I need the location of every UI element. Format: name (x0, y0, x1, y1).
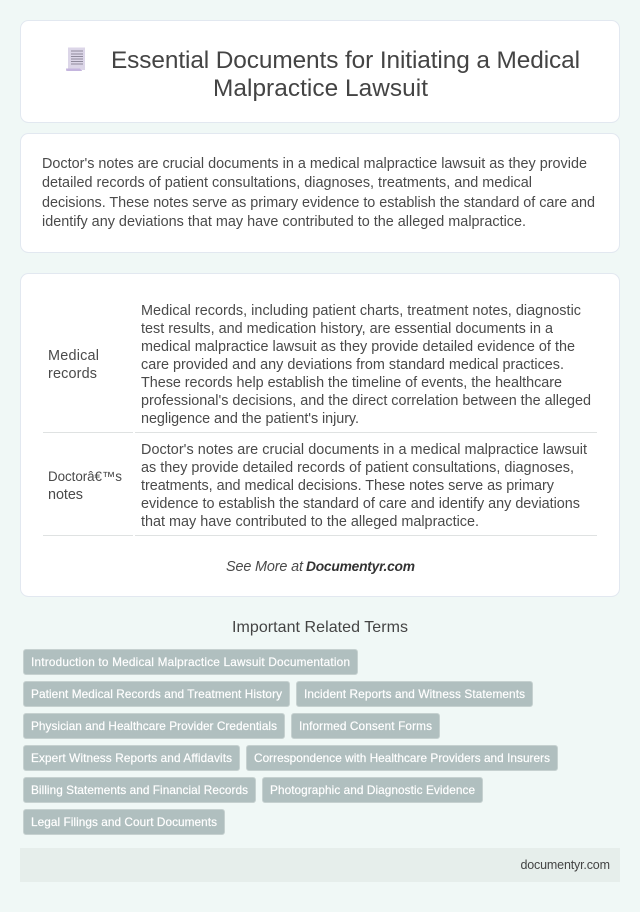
row label: medical records (48, 348, 99, 382)
row description: medical records (141, 303, 591, 427)
see more link: Documentyr.com (306, 559, 415, 574)
icon: document scroll (66, 48, 85, 71)
tag: Incident Reports and Witness Statements (304, 687, 525, 701)
row description: doctor's notes: that may have contributed to the alleged malpractice. (141, 514, 479, 530)
table row: medical records (48, 303, 591, 427)
tag (296, 682, 532, 706)
intro paragraph: Doctor's notes are crucial documents in a medical malpractice lawsuit as they provide (42, 156, 587, 172)
intro paragraph: detailed records of patient consultations, diagnoses, treatments, and medical (42, 175, 532, 191)
row description: doctor's notes: treatments, and medical decisions. These notes serve as primary (141, 478, 555, 494)
tag (24, 650, 358, 674)
tag (24, 746, 240, 770)
tag: Patient Medical Records and Treatment History (31, 687, 282, 701)
row label: doctor's notes: Doctorâ€™s (48, 469, 122, 484)
row description: medical records: professional's decisions, and the direct correlation between the alleged (141, 393, 591, 409)
row description: doctor's notes: Doctor's notes are crucial documents in a medical malpractice lawsuit (141, 442, 587, 458)
row description: medical records: care provided and any deviations from standard medical practices. (141, 357, 564, 373)
tag (24, 682, 290, 706)
intro paragraph: decisions. These notes serve as primary evidence to establish the standard of care and (42, 195, 595, 211)
title: Malpractice Lawsuit (213, 75, 428, 102)
row description: medical records: negligence and the patient's injury. (141, 411, 359, 427)
tag (24, 810, 224, 834)
tag (24, 778, 256, 802)
tag: Legal Filings and Court Documents (31, 815, 217, 829)
row label: doctor's notes (48, 469, 122, 503)
footer bar (20, 848, 620, 882)
panel: intro text card (20, 134, 620, 252)
row description: doctor's notes: as they provide detailed records of patient consultations, diagnoses, (141, 460, 574, 476)
row description: doctor's notes (141, 442, 587, 530)
table row: doctor's notes (48, 442, 587, 530)
row description: medical records: These records help establish the timeline of events, the healthcare (141, 375, 562, 391)
tag: Photographic and Diagnostic Evidence (270, 783, 475, 797)
tag (262, 778, 482, 802)
tag (292, 714, 440, 738)
row label: doctor's notes: notes (48, 487, 83, 503)
row label: medical records: records (48, 366, 97, 382)
tag: Introduction to Medical Malpractice Lawsuit Documentation (31, 655, 350, 669)
tag: Expert Witness Reports and Affidavits (31, 751, 232, 765)
row description: medical records: test results, and medication history, are essential documents in a (141, 321, 553, 337)
title (111, 47, 580, 102)
tag: Informed Consent Forms (299, 719, 432, 733)
row description: doctor's notes: evidence to establish the standard of care and identify any deviations (141, 496, 580, 512)
see more link: See More at (226, 559, 304, 575)
title: Essential Documents for Initiating a Medical (111, 47, 580, 74)
footer site name: documentyr.com (520, 858, 610, 872)
intro paragraph (42, 156, 595, 230)
intro paragraph: identify any deviations that may have contributed to the alleged malpractice. (42, 214, 526, 230)
panel: documents table card (20, 274, 620, 596)
tag: Billing Statements and Financial Records (31, 783, 248, 797)
row label: medical records: Medical (48, 348, 99, 364)
related terms tags (24, 650, 558, 834)
tag: Correspondence with Healthcare Providers and Insurers (254, 751, 550, 765)
tag (24, 714, 284, 738)
row description: medical records: Medical records, including patient charts, treatment notes, diagnostic (141, 303, 581, 319)
row description: medical records: medical malpractice lawsuit as they provide detailed evidence of the (141, 339, 575, 355)
see more link (226, 559, 415, 575)
tag: Physician and Healthcare Provider Credentials (31, 719, 277, 733)
heading: important related terms: Important Related Terms (232, 619, 408, 636)
tag (246, 746, 558, 770)
panel: title card (20, 20, 620, 122)
